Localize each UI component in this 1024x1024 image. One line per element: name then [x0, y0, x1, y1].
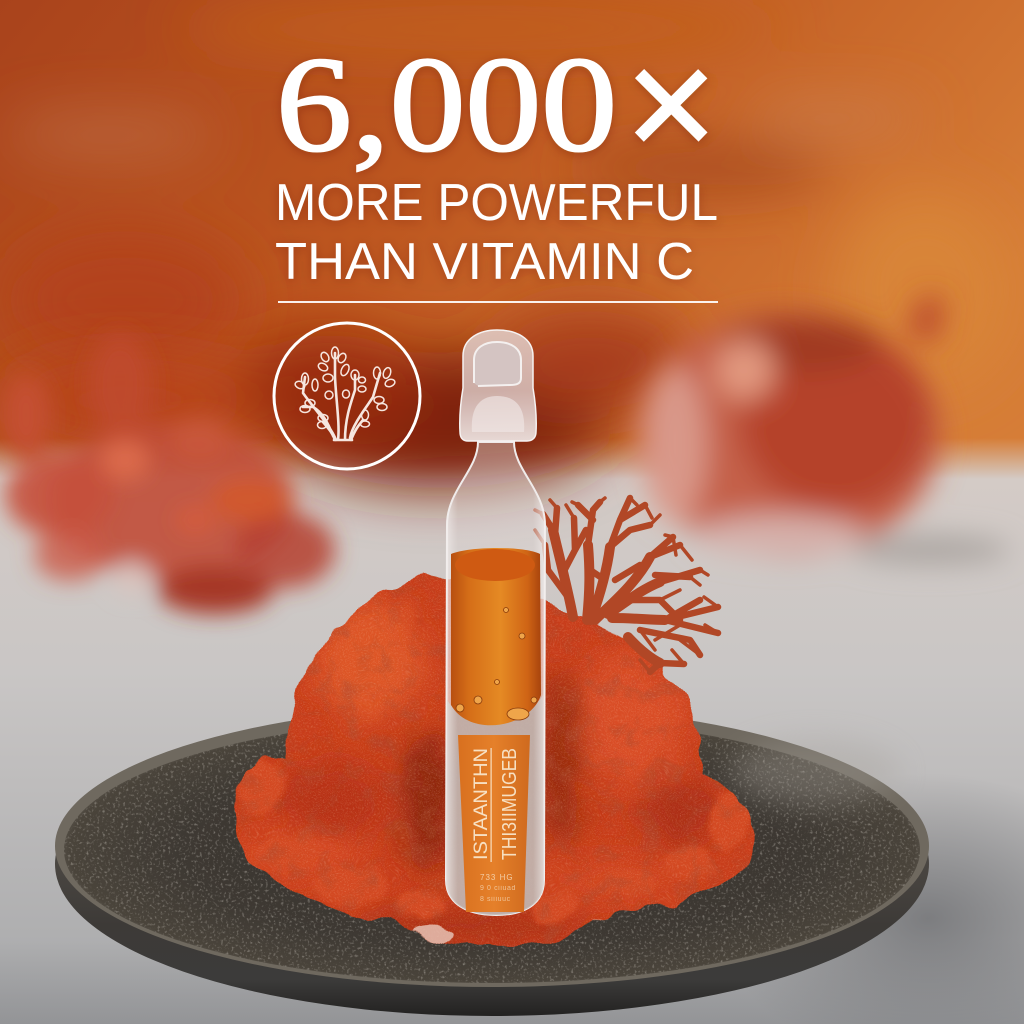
glass reflections	[446, 442, 545, 915]
label text: 733 HG	[480, 873, 514, 882]
divider rule	[278, 301, 718, 303]
label text: ISTAANTHN	[471, 748, 492, 860]
subheading: MORE POWERFUL THAN VITAMIN C: THAN VITAMIN C	[275, 233, 694, 291]
background: dark red mass behind the vial	[5, 310, 690, 488]
plate	[55, 705, 929, 1016]
headline: 6,000×: 6,000	[276, 30, 617, 180]
glass ampoule	[446, 330, 545, 915]
blurred coral, left	[2, 333, 335, 614]
liquid surface	[455, 549, 535, 581]
cap lower dome	[472, 396, 524, 432]
background: blurred orange wall	[0, 0, 1024, 560]
amber liquid	[451, 548, 541, 725]
bubbles	[456, 608, 537, 720]
lower vial band	[446, 695, 544, 915]
cap inner bulb	[474, 342, 521, 386]
red seaweed sprig	[535, 498, 718, 672]
headline: 6,000×: ×	[625, 16, 717, 192]
subheading: MORE POWERFUL THAN VITAMIN C: MORE POWERFUL	[275, 174, 718, 232]
label text: 8 siiiuuc	[480, 896, 511, 903]
headline: 6,000×	[276, 16, 717, 192]
label text	[471, 748, 521, 903]
subheading: MORE POWERFUL THAN VITAMIN C	[275, 174, 718, 291]
orange label	[458, 735, 530, 912]
label text: THI3IIMUGEB	[499, 748, 521, 860]
label text: 9 0 ciiuad	[480, 885, 516, 892]
background: blurred table	[0, 438, 1024, 1024]
ampoule cap	[460, 330, 536, 441]
ampoule body glass	[446, 442, 545, 915]
blurred pomegranate, right	[636, 295, 1010, 564]
table shadows	[0, 760, 1024, 1024]
icon: seaweed in circle	[274, 323, 420, 469]
sorbet scoop	[234, 572, 755, 947]
